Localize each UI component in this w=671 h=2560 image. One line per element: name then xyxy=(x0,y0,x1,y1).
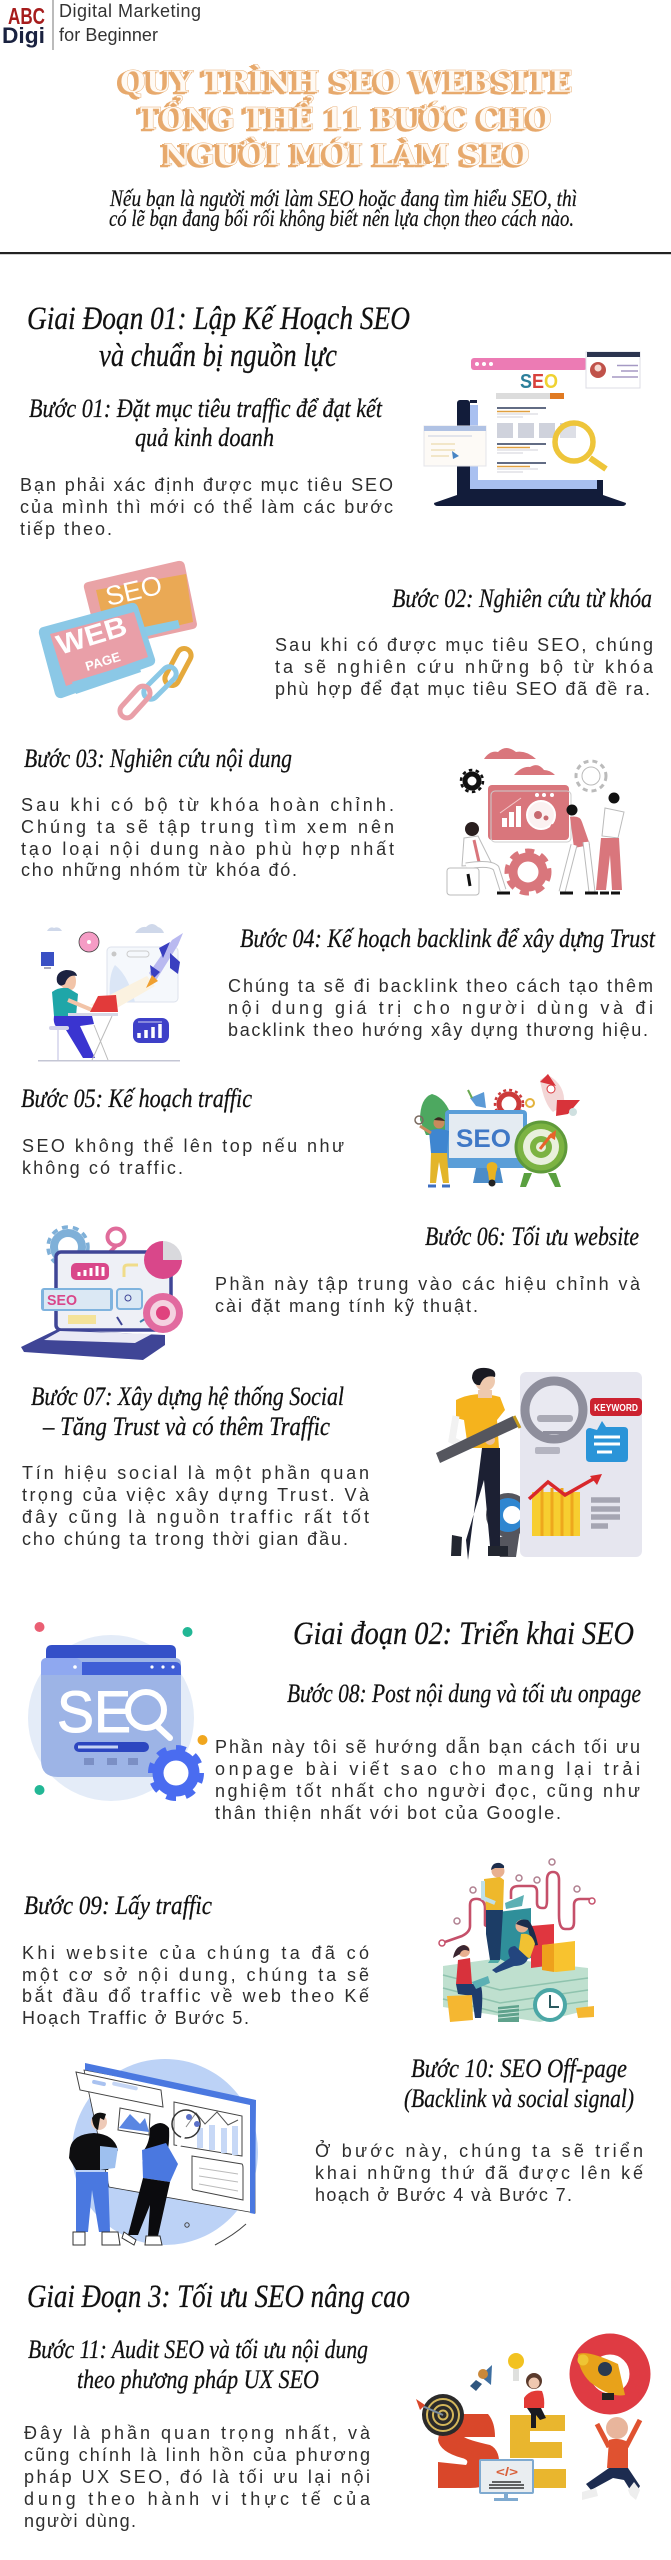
icon: SEO laptop with magnifier: S xyxy=(520,371,532,393)
step 02 text xyxy=(275,635,654,699)
title: TỔNG THỂ 11 BƯỚC CHO xyxy=(140,95,552,137)
icon: man with magnifier and keyword document xyxy=(436,1368,642,1560)
step 01 heading xyxy=(29,394,383,452)
step 10 text: khai những thứ đã được lên kế xyxy=(315,2163,643,2183)
icon: SEO monitor with target xyxy=(415,1074,580,1187)
panel: step 04 xyxy=(38,924,656,1062)
step 04 text: nội dung giá trị cho người dùng và đi xyxy=(228,998,653,1018)
step 03 text: cho những nhóm từ khóa đó. xyxy=(21,860,297,880)
step 08 text xyxy=(215,1736,640,1823)
panel: step 05 xyxy=(21,1074,580,1187)
icon: team with dashboard and gears xyxy=(447,748,624,895)
step 08 text: thân thiện nhất với bot của Google. xyxy=(215,1803,561,1823)
step 01 text xyxy=(20,475,393,539)
intro text xyxy=(109,186,577,231)
step 01 heading: Bước 01: Đặt mục tiêu traffic để đạt kết xyxy=(29,394,383,423)
icon: purple laptop with gears and target xyxy=(21,1227,183,1360)
step 07 text: trọng của việc xây dựng Trust. Và xyxy=(22,1485,370,1505)
step 03 text: Sau khi có bộ từ khóa hoàn chỉnh. xyxy=(21,795,394,815)
icon: SEO laptop with magnifier: O xyxy=(544,371,558,393)
step 08 text: onpage bài viết sao cho mang lại trải xyxy=(215,1759,640,1779)
step 07 heading: – Tăng Trust và có thêm Traffic xyxy=(42,1412,330,1441)
step 09 text: bắt đầu đổ traffic về web theo Kế xyxy=(22,1985,369,2006)
panel: step 03 xyxy=(21,744,624,895)
intro text: Nếu bạn là người mới làm SEO hoặc đang tìm hiểu SEO, thì xyxy=(109,186,577,211)
icon: web page and SEO cards with chain: WEB xyxy=(53,610,131,661)
icon: woman with laptop and rocket xyxy=(38,924,183,1062)
icon: web page and SEO cards with chain: PAGE xyxy=(83,649,123,674)
intro text: có lẽ bạn đang bối rối không biết nên lựa chọn theo cách nào. xyxy=(109,206,574,231)
step 07 heading: Bước 07: Xây dựng hệ thống Social xyxy=(31,1382,344,1411)
step 07 text: Tín hiệu social là một phần quan xyxy=(22,1463,369,1483)
panel: step 11 xyxy=(24,2335,640,2531)
step 11 heading: Bước 11: Audit SEO và tối ưu nội dung xyxy=(28,2335,368,2364)
icon: two people analysing a board xyxy=(69,2059,258,2245)
step 03 heading: Bước 03: Nghiên cứu nội dung xyxy=(24,744,292,773)
step 10 heading xyxy=(404,2054,634,2113)
step 02 text: ta sẽ nghiên cứu những bộ từ khóa xyxy=(275,657,654,677)
step 11 heading: theo phương pháp UX SEO xyxy=(77,2365,319,2394)
step 05 text xyxy=(22,1136,344,1178)
step 03 text: tạo loại nội dung nào phù hợp nhất xyxy=(21,839,394,859)
step 11 heading xyxy=(28,2335,368,2394)
step 07 text: đây cũng là nguồn traffic rất tốt xyxy=(22,1507,369,1527)
step 10 text: hoạch ở Bước 4 và Bước 7. xyxy=(315,2185,572,2205)
step 10 heading: Bước 10: SEO Off-page xyxy=(411,2054,627,2083)
icon: man with magnifier and keyword document: KEYWORD xyxy=(594,1403,638,1414)
step 11 text: Đây là phần quan trọng nhất, và xyxy=(24,2423,371,2443)
step 08 text: Phần này tôi sẽ hướng dẫn bạn cách tối ưu xyxy=(215,1736,640,1757)
icon: web page and SEO cards with chain: SEO xyxy=(103,570,165,612)
step 09 text: một cơ sở nội dung, chúng ta sẽ xyxy=(22,1965,369,1985)
step 07 text xyxy=(22,1463,370,1549)
icon: 3D SEO letters with people xyxy=(416,2344,640,2501)
step 09 text: Hoạch Traffic ở Bước 5. xyxy=(22,2008,249,2028)
step 03 text xyxy=(21,795,394,880)
step 10 text: Ở bước này, chúng ta sẽ triển xyxy=(315,2140,643,2161)
panel: step 10 xyxy=(69,2054,643,2245)
step 01 heading: quả kinh doanh xyxy=(135,423,274,452)
step 03 text: Chúng ta sẽ tập trung tìm xem nên xyxy=(21,817,394,837)
heading: stage 1: Giai Đoạn 01: Lập Kế Hoạch SEO xyxy=(27,301,410,337)
step 11 text: cũng chính là linh hồn của phương xyxy=(24,2445,370,2465)
step 09 heading: Bước 09: Lấy traffic xyxy=(24,1891,212,1920)
step 06 text: Phần này tập trung vào các hiệu chỉnh và xyxy=(215,1274,641,1294)
title: QUY TRÌNH SEO WEBSITE xyxy=(120,64,573,100)
heading: stage 1: và chuẩn bị nguồn lực xyxy=(99,338,337,374)
step 08 text: nghiệm tốt nhất cho người đọc, cũng như xyxy=(215,1781,640,1801)
title xyxy=(120,64,573,173)
logo: ABC Digi: for Beginner xyxy=(59,25,158,45)
icon: SEO laptop with magnifier xyxy=(424,352,640,506)
panel: step 06 xyxy=(21,1222,641,1360)
heading: stage 1 xyxy=(27,301,410,374)
title: NGƯỜI MỚI LÀM SEO xyxy=(163,137,530,173)
step 11 text: dung theo hành vi thực tế của xyxy=(24,2489,371,2509)
icon: 3D SEO letters with people: </> xyxy=(496,2465,518,2479)
step 05 text: SEO không thể lên top nếu như xyxy=(22,1136,344,1156)
logo: ABC Digi xyxy=(2,0,201,50)
step 06 text: cài đặt mang tính kỹ thuật. xyxy=(215,1296,478,1316)
icon: team on isometric chart blocks xyxy=(439,1859,595,2022)
step 02 text: phù hợp để đạt mục tiêu SEO đã đề ra. xyxy=(275,679,650,699)
step 05 text: không có traffic. xyxy=(22,1158,183,1178)
step 05 heading: Bước 05: Kế hoạch traffic xyxy=(21,1084,252,1113)
logo: ABC Digi: Digital Marketing xyxy=(59,1,201,21)
panel: step 01 xyxy=(20,352,640,539)
step 10 text xyxy=(315,2140,643,2205)
icon: SEO laptop with magnifier: E xyxy=(532,371,544,393)
heading: stage 3: Giai Đoạn 3: Tối ưu SEO nâng cao xyxy=(27,2279,410,2315)
step 07 text: cho chúng ta trong thời gian đầu. xyxy=(22,1529,348,1549)
icon: SEO browser window with gear xyxy=(28,1622,208,1801)
icon: SEO monitor with target: SEO xyxy=(456,1125,511,1153)
icon: web page and SEO cards with chain xyxy=(39,561,197,721)
step 11 text xyxy=(24,2423,371,2531)
step 01 text: tiếp theo. xyxy=(20,519,112,539)
panel: step 08 xyxy=(28,1622,641,1823)
step 02 text: Sau khi có được mục tiêu SEO, chúng xyxy=(275,635,653,655)
step 04 text xyxy=(228,976,653,1040)
step 09 text xyxy=(22,1943,369,2028)
logo: ABC Digi: ABC xyxy=(8,3,45,29)
step 01 text: của mình thì mới có thể làm các bước xyxy=(20,497,393,517)
icon: SEO browser window with gear: SE xyxy=(57,1680,131,1745)
step 07 heading xyxy=(31,1382,344,1441)
step 04 text: Chúng ta sẽ đi backlink theo cách tạo thêm xyxy=(228,976,653,996)
step 06 text xyxy=(215,1274,641,1316)
step 11 text: người dùng. xyxy=(24,2511,136,2531)
step 11 text: pháp UX SEO, đó là tối ưu lại nội xyxy=(24,2467,370,2487)
icon: purple laptop with gears and target: SEO xyxy=(47,1292,77,1309)
step 04 text: backlink theo hướng xây dựng thương hiệu. xyxy=(228,1020,648,1040)
panel: step 07 xyxy=(22,1368,642,1560)
panel: step 09 xyxy=(22,1859,595,2028)
panel: step 02 xyxy=(39,561,654,721)
logo: ABC Digi: Digi xyxy=(2,23,45,48)
step 09 text: Khi website của chúng ta đã có xyxy=(22,1943,369,1963)
step 01 text: Bạn phải xác định được mục tiêu SEO xyxy=(20,475,393,495)
